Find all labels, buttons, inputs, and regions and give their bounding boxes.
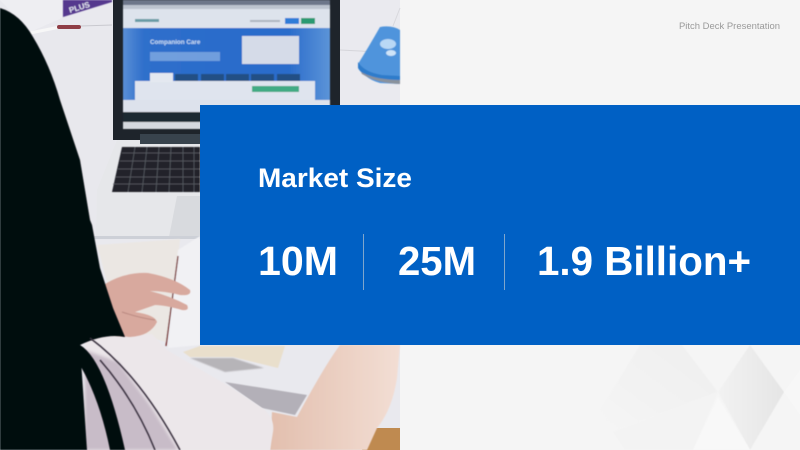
forearm — [270, 345, 400, 450]
panel: blue market size band — [200, 105, 800, 345]
lilac shirt shade — [85, 350, 178, 450]
desk below laptop — [93, 236, 200, 239]
divider 1 — [363, 234, 364, 290]
laptop base — [96, 140, 340, 237]
heading: Market Size: Market Size — [258, 163, 412, 193]
stat: 10M: 10M — [258, 238, 338, 284]
purple box: PLUS — [68, 0, 92, 15]
photo: woman working at laptop — [0, 0, 400, 450]
panel: right background with diamond pattern — [400, 0, 800, 450]
blue device — [358, 26, 400, 84]
red clip — [57, 25, 81, 29]
browser page — [123, 0, 330, 129]
white t-shirt — [85, 334, 273, 450]
desk edge — [225, 382, 307, 415]
trackpad — [169, 196, 200, 237]
keyboard — [112, 147, 200, 192]
long black hair — [0, 8, 125, 450]
hair strands — [90, 338, 180, 450]
wire — [81, 25, 112, 26]
divider 2 — [504, 234, 505, 290]
stat: 1.9 Billion+: 1.9 Billion+ — [537, 238, 751, 284]
cable — [30, 27, 60, 33]
notebook — [97, 236, 285, 372]
hinge — [140, 134, 240, 144]
browser page: Companion Care — [150, 39, 201, 46]
wood floor — [362, 428, 400, 450]
stat: 25M: 25M — [398, 238, 476, 284]
label: Pitch Deck Presentation: Pitch Deck Presentation — [679, 21, 780, 32]
hand — [78, 273, 190, 337]
desk surface — [0, 0, 400, 240]
laptop screen bezel — [113, 0, 340, 140]
purple box — [63, 0, 112, 17]
laptop — [96, 0, 340, 237]
